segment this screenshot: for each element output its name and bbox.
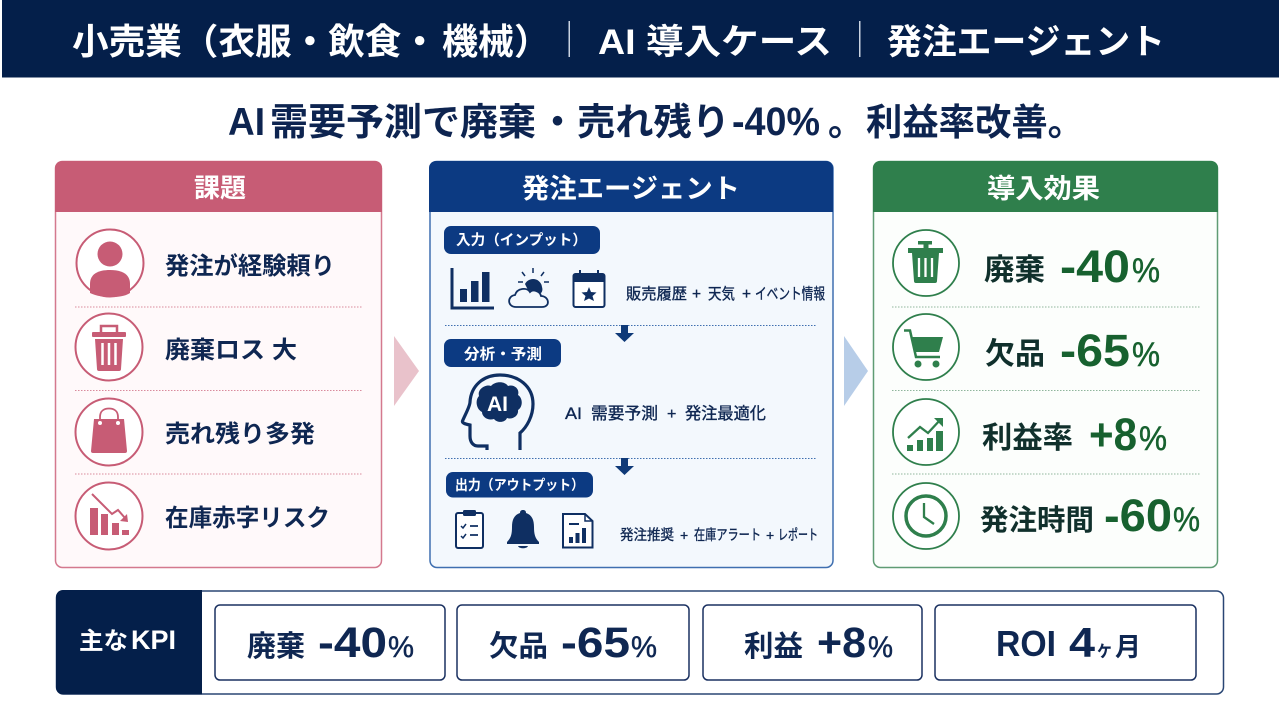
text: input sources: + [692, 286, 701, 303]
arrow: 課題 to agent [394, 336, 419, 406]
stat: 利益率 +8% [982, 409, 1167, 460]
KPI: ROI 4ヶ月 [935, 605, 1196, 680]
icon: report [563, 514, 592, 548]
KPI: 欠品 -65%: % [631, 631, 657, 664]
title: -40% [732, 100, 820, 144]
icon: growth chart [893, 399, 959, 465]
text: outputs [620, 527, 818, 544]
stat: 欠品 -65%: -65 [1060, 325, 1130, 376]
title [228, 100, 1084, 144]
KPI: 利益 +8%: % [868, 631, 893, 664]
stat: 発注時間 -60% [980, 490, 1200, 541]
text: input sources: + [742, 286, 751, 303]
icon: bell [507, 510, 539, 548]
icon: trash [893, 230, 959, 296]
panel: 導入効果: 導入効果 [987, 174, 1100, 204]
text: outputs: + [680, 527, 688, 543]
title: AI [228, 101, 265, 144]
icon: trash [76, 314, 142, 380]
pill: 出力 [446, 472, 593, 498]
arrow: input to analysis [615, 325, 634, 342]
panel: 主なKPI: 主な [79, 628, 128, 655]
text: input sources: 販売履歴 [626, 285, 687, 303]
KPI: 利益 +8%: +8 [817, 619, 866, 667]
icon: sun and cloud [509, 268, 549, 307]
title: 売れ残り [577, 101, 730, 143]
stat: 廃棄 -40%: % [1132, 252, 1160, 290]
pill: 分析・予測: 分析・予測 [464, 345, 542, 363]
KPI: 廃棄 -40%: 廃棄 [247, 630, 305, 663]
text: analysis [565, 404, 766, 423]
text: 在庫赤字リスク: 在庫赤字リスク [165, 505, 330, 532]
text: 廃棄ロス 大: 廃棄ロス 大 [165, 337, 297, 364]
text: input sources [626, 285, 825, 303]
text: outputs: レポート [778, 527, 818, 544]
text: 発注が経験頼り: 発注が経験頼り [165, 252, 335, 280]
KPI: ROI 4ヶ月: ROI [996, 623, 1056, 664]
text: input sources: 天気 [708, 285, 735, 303]
stat: 廃棄 -40%: 廃棄 [984, 254, 1045, 287]
title: 利益率改善。 [866, 102, 1084, 143]
icon: AI head: AI [487, 393, 508, 416]
icon: cart [893, 314, 959, 380]
stat: 廃棄 -40%: -40 [1060, 241, 1130, 292]
panel: 主なKPI: KPI [131, 625, 176, 655]
stat: 利益率 +8%: 利益率 [982, 422, 1073, 455]
header bar [2, 0, 1279, 78]
KPI: 欠品 -65%: -65 [561, 619, 630, 667]
header bar: AI 導入ケース [598, 23, 832, 62]
KPI: 欠品 -65% [457, 605, 689, 680]
header bar: 小売業（衣服・飲食・ [72, 21, 438, 62]
text: analysis: AI [565, 404, 582, 423]
stat: 発注時間 -60%: -60 [1104, 490, 1172, 541]
KPI: 廃棄 -40% [215, 605, 445, 680]
arrow: agent to effects [844, 336, 868, 406]
KPI: 利益 +8% [703, 605, 922, 680]
icon: shopping bag [76, 398, 142, 466]
text: analysis: 発注最適化 [685, 404, 766, 423]
pill: 入力: 入力（インプット） [456, 232, 587, 249]
header bar: 機械） [442, 21, 550, 62]
title: 。 [828, 102, 864, 143]
icon: calendar [573, 270, 605, 307]
stat: 欠品 -65%: 欠品 [985, 338, 1045, 371]
KPI: 廃棄 -40%: -40 [318, 619, 387, 667]
KPI: ROI 4ヶ月: 4 [1069, 619, 1096, 666]
KPI: ROI 4ヶ月: ヶ [1096, 639, 1113, 661]
panel: 導入効果 [873, 161, 1218, 568]
panel: 発注エージェント [429, 161, 833, 568]
pill: 入力 [444, 226, 600, 254]
panel: 課題 [55, 161, 382, 568]
icon: clipboard [456, 510, 483, 548]
text: outputs: 発注推奨 [620, 527, 674, 544]
text: analysis: + [667, 406, 676, 423]
title: 需要予測で廃棄 [270, 101, 536, 143]
KPI: 欠品 -65%: 欠品 [489, 630, 548, 663]
KPI: 廃棄 -40%: % [388, 631, 414, 664]
stat: 廃棄 -40% [984, 241, 1160, 292]
stat: 欠品 -65% [985, 325, 1160, 376]
text: input sources: イベント情報 [755, 285, 825, 303]
icon: person [76, 230, 144, 297]
panel: 発注エージェント: 発注エージェント [522, 174, 740, 204]
stat: 利益率 +8%: % [1139, 420, 1167, 458]
arrow: analysis to output [615, 458, 634, 475]
panel: 課題: 課題 [194, 173, 246, 203]
icon: falling chart [76, 482, 142, 550]
stat: 欠品 -65%: % [1132, 336, 1160, 374]
pill: 分析・予測 [444, 339, 561, 367]
stat: 発注時間 -60%: % [1173, 501, 1200, 539]
KPI: ROI 4ヶ月: 月 [1115, 632, 1141, 662]
text: 売れ残り多発: 売れ残り多発 [165, 420, 315, 448]
icon: clock [893, 483, 959, 549]
stat: 利益率 +8%: +8 [1089, 409, 1137, 460]
icon: AI head [462, 375, 533, 450]
stat: 発注時間 -60%: 発注時間 [980, 504, 1094, 537]
panel: 主なKPI [56, 590, 1224, 694]
KPI: 利益 +8%: 利益 [744, 630, 803, 663]
text: analysis: 需要予測 [591, 404, 658, 423]
icon: bar chart [452, 268, 494, 308]
title: ・ [539, 101, 576, 143]
text: outputs: 在庫アラート [694, 527, 761, 544]
header bar: 発注エージェント [887, 23, 1165, 62]
pill: 出力: 出力（アウトプット） [455, 477, 584, 493]
text: outputs: + [766, 527, 774, 543]
